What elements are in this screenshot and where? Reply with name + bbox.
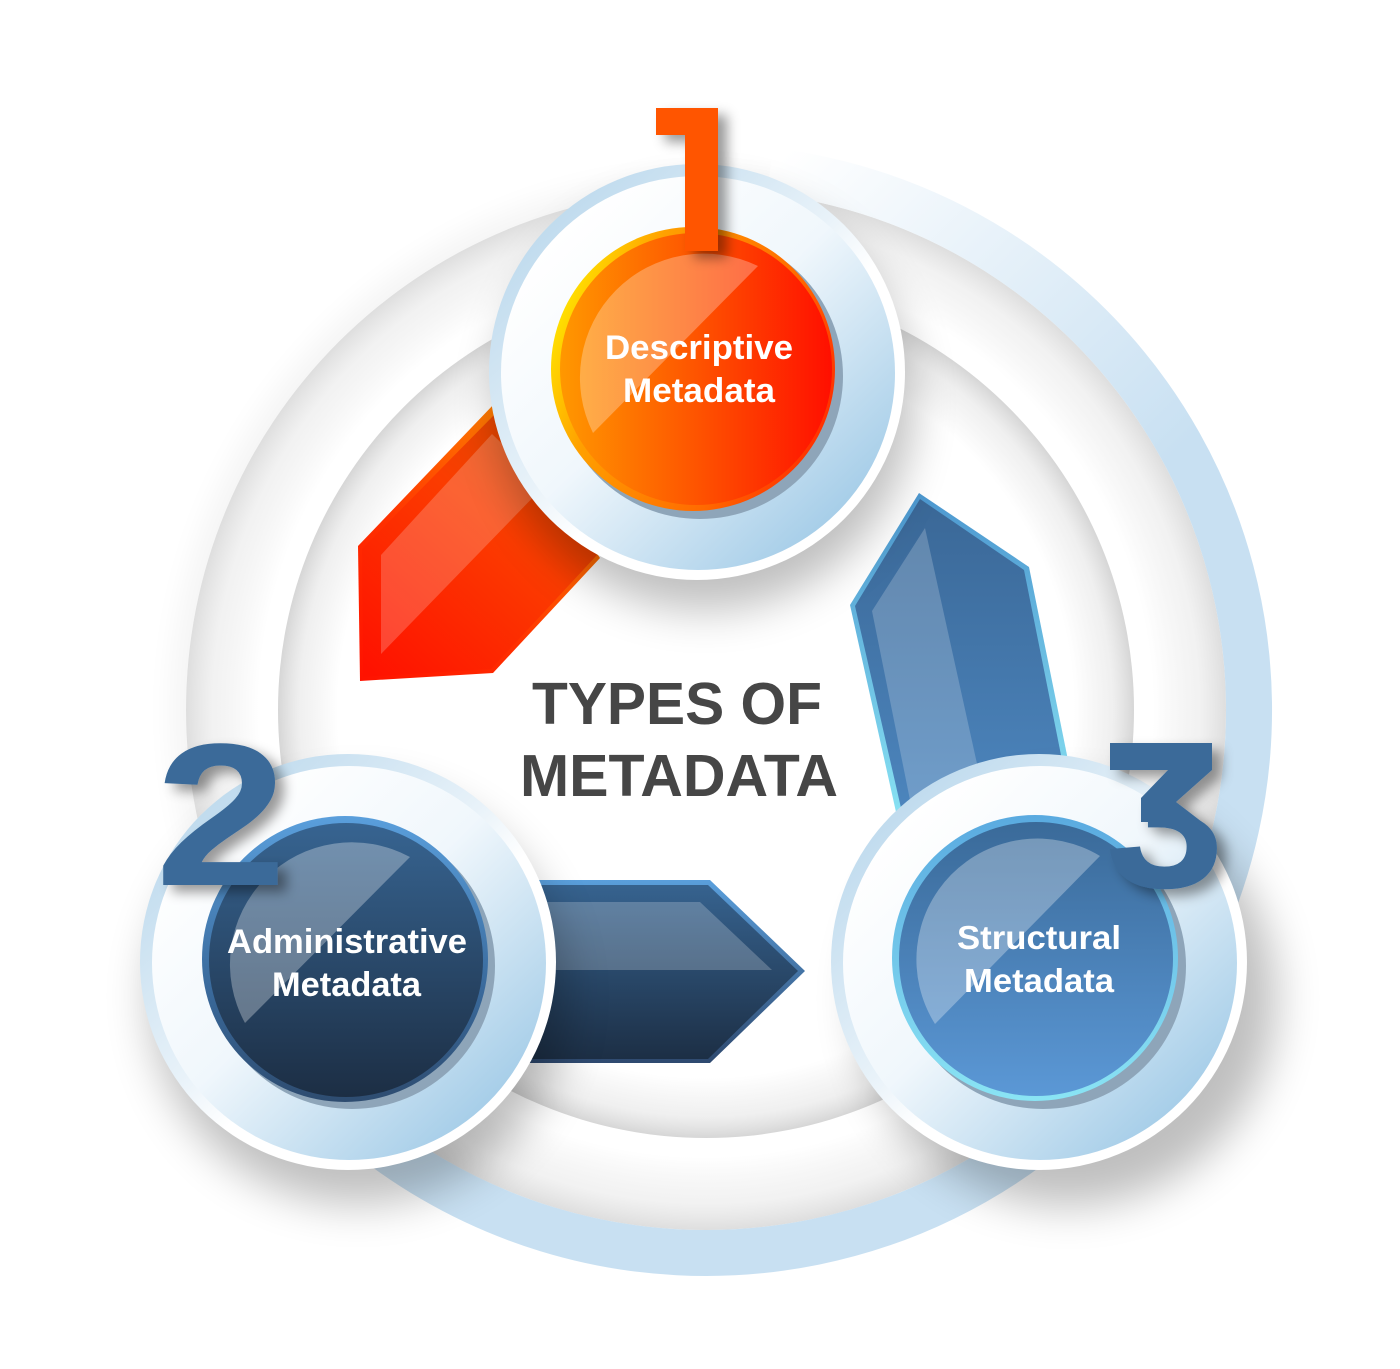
number 3: 3 bbox=[1105, 705, 1225, 931]
number 1: 1 bbox=[625, 71, 736, 294]
title: TYPES OF bbox=[532, 671, 822, 737]
node: Descriptive Metadata bbox=[489, 164, 913, 610]
node: Structural Metadata bbox=[831, 754, 1276, 1206]
node: Administrative Metadata: Metadata bbox=[272, 966, 422, 1004]
node: Structural Metadata: Structural bbox=[957, 919, 1121, 956]
arrow: navy from Administrative Metadata bbox=[520, 880, 805, 1063]
node: Descriptive Metadata: Metadata bbox=[623, 372, 776, 410]
node: Administrative Metadata: Administrative bbox=[227, 923, 467, 961]
title: METADATA bbox=[520, 743, 838, 809]
node: Administrative Metadata bbox=[140, 754, 566, 1204]
outer blue ring arc bbox=[340, 171, 1249, 1253]
title bbox=[520, 671, 838, 809]
number 1 bbox=[656, 107, 735, 266]
arrow: orange from Descriptive Metadata bbox=[358, 403, 600, 681]
arrow: blue from Structural Metadata bbox=[850, 493, 1070, 812]
number 3 bbox=[1110, 742, 1234, 904]
node: Structural Metadata: Metadata bbox=[964, 962, 1115, 999]
number 2: 2 bbox=[155, 701, 287, 928]
background: concentric white rings bbox=[171, 175, 1241, 1245]
node: Descriptive Metadata: Descriptive bbox=[605, 329, 793, 367]
